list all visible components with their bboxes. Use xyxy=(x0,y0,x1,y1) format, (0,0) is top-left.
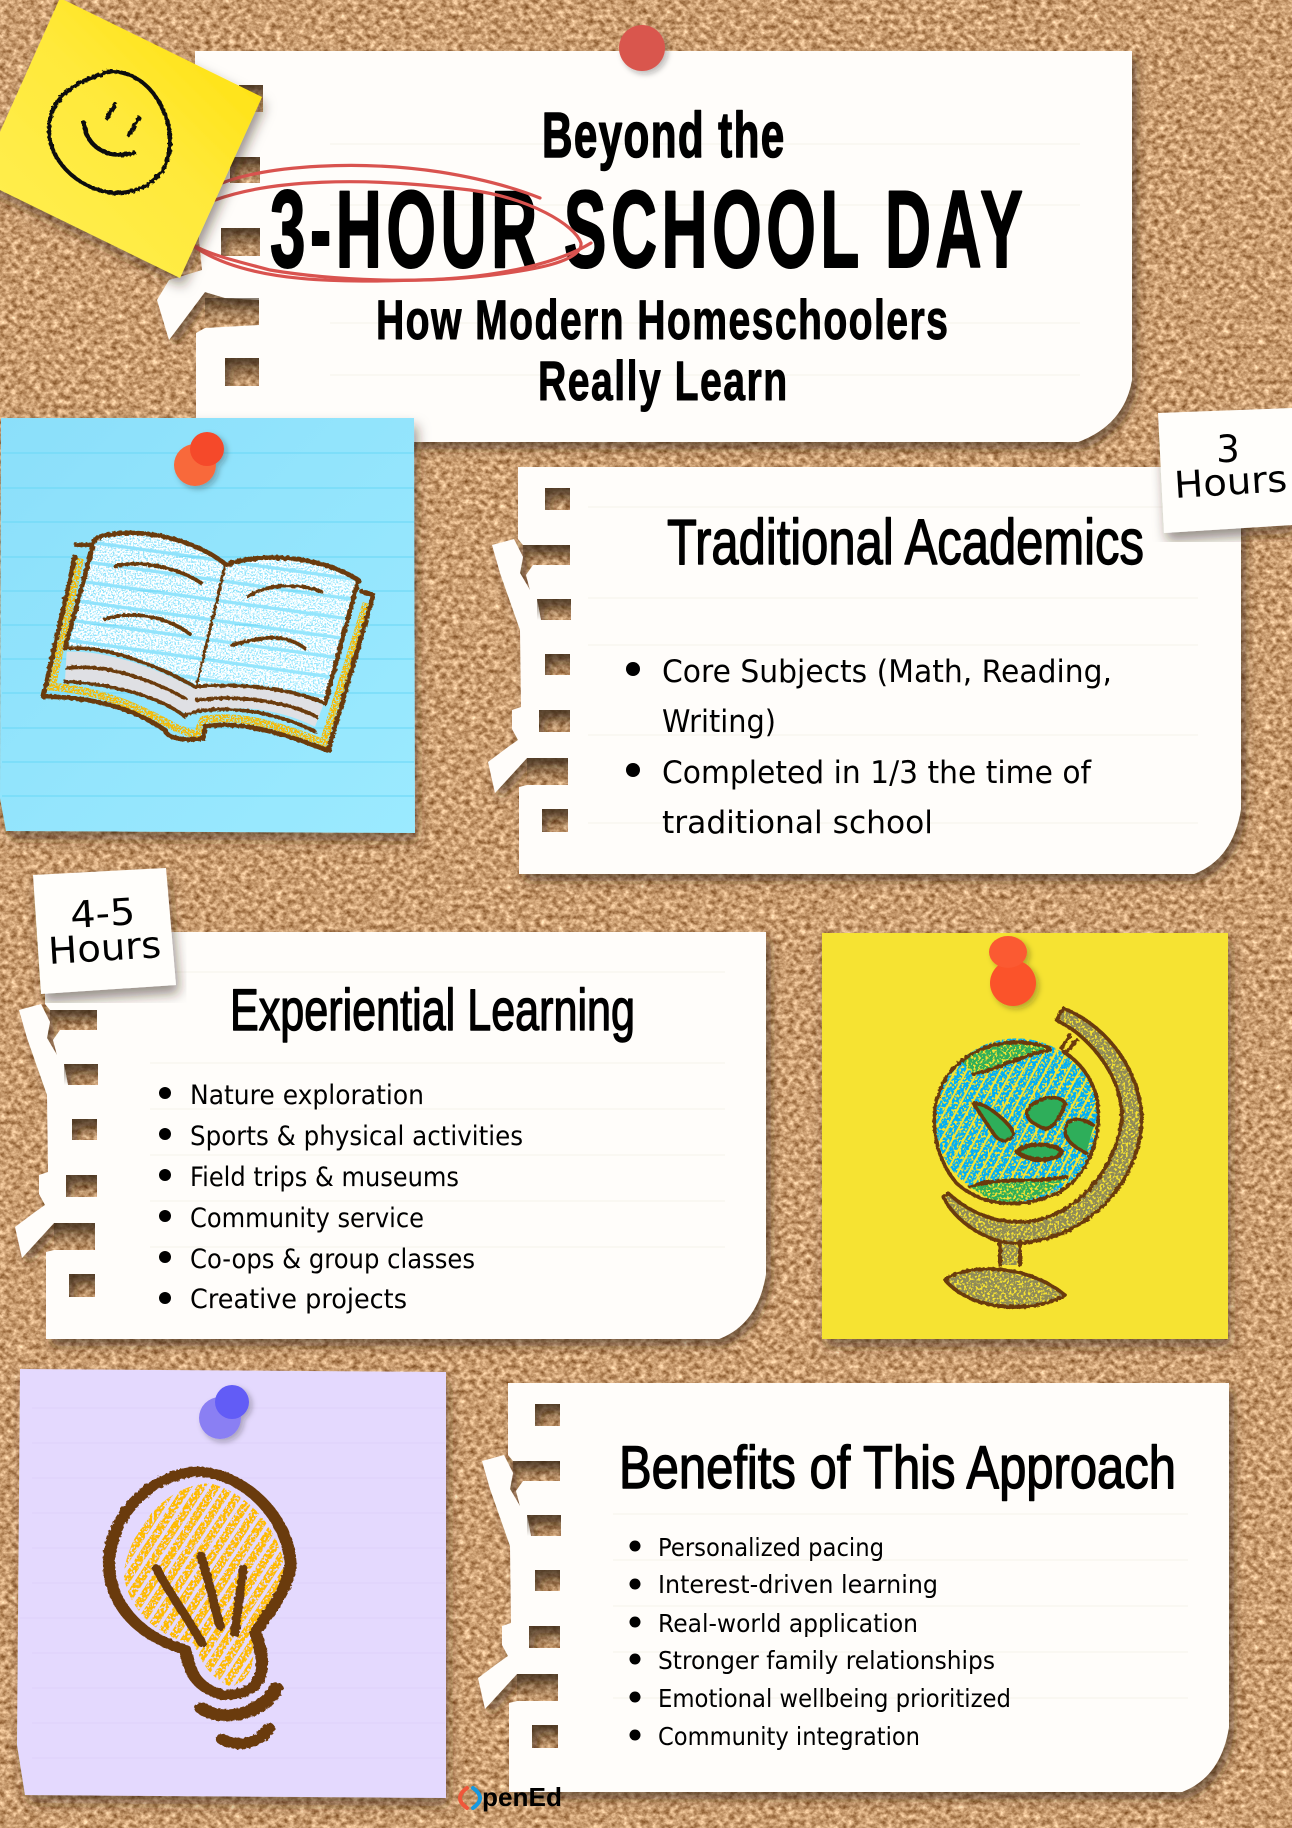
bullet list: Experiential Learning: Sports & physical activities xyxy=(190,1121,523,1152)
sticky note xyxy=(0,418,415,833)
panel: yellow sticky note with globe xyxy=(822,933,1228,1339)
bullet list: Benefits: Community integration xyxy=(658,1722,920,1751)
tag: 4-5 Hours xyxy=(33,868,176,994)
torn paper sheet xyxy=(478,1383,1229,1792)
red hand-drawn circle around 3-HOUR xyxy=(193,165,591,281)
bullet list: Experiential Learning: Co-ops & group classes xyxy=(190,1244,475,1275)
list item text: Core Subjects (Math, Reading, xyxy=(662,654,1112,690)
pin: orange-red xyxy=(174,432,224,486)
icon: open book xyxy=(43,533,373,751)
list item text: Nature exploration xyxy=(190,1080,424,1111)
hole shading: title paper xyxy=(205,85,263,386)
panel: Traditional Academics paper xyxy=(488,467,1241,874)
bullet list: Benefits: Emotional wellbeing prioritized xyxy=(658,1684,1011,1713)
pin: red-orange xyxy=(989,936,1036,1006)
panel: purple sticky note with light bulb xyxy=(17,1369,446,1798)
tag: 3 Hours: 3 xyxy=(1216,428,1240,471)
heading: Beyond the: Beyond the xyxy=(542,100,784,171)
heading: 3-HOUR SCHOOL DAY: 3-HOUR SCHOOL DAY xyxy=(270,169,1023,291)
sticky note xyxy=(0,0,262,278)
icon: globe xyxy=(934,1008,1142,1307)
sticky note xyxy=(822,933,1228,1339)
panel: yellow sticky note with smiley xyxy=(0,0,262,278)
pin: violet xyxy=(199,1385,249,1439)
hole shading xyxy=(50,1010,98,1297)
list item text: Personalized pacing xyxy=(658,1533,884,1562)
logo: OpenEd: penEd xyxy=(482,1782,562,1812)
subheading: Really Learn: Really Learn xyxy=(538,350,787,413)
heading: Benefits of This Approach: Benefits of This Approach xyxy=(619,1434,1176,1501)
bullet list: Experiential Learning: Creative projects xyxy=(190,1284,407,1315)
hole shading xyxy=(513,1404,561,1748)
heading: Experiential Learning: Experiential Learning xyxy=(230,978,635,1043)
bullet list: Traditional Academics xyxy=(626,654,1112,841)
tag: 3 Hours xyxy=(1158,408,1292,533)
bullet list: Benefits: Stronger family relationships xyxy=(658,1646,995,1675)
tag: 3 Hours: Hours xyxy=(1173,457,1288,507)
panel: Benefits of This Approach paper xyxy=(478,1383,1229,1792)
panel: title paper xyxy=(157,25,1132,442)
torn paper sheet xyxy=(488,467,1241,874)
panel: blue sticky note with book xyxy=(0,418,415,833)
tag: 4-5 Hours: 4-5 xyxy=(69,890,136,937)
panel: Experiential Learning paper xyxy=(15,932,766,1339)
bullet list: Traditional Academics: Completed in 1/3 the time of xyxy=(662,755,1092,791)
bullet list: Experiential Learning: Community service xyxy=(190,1203,424,1234)
subheading: How Modern Homeschoolers: How Modern Homeschoolers xyxy=(376,289,948,352)
bullet list: Experiential Learning xyxy=(159,1080,523,1315)
bullet list: Benefits xyxy=(630,1533,1011,1751)
bullet list: Benefits: Real-world application xyxy=(658,1609,918,1638)
pin: red xyxy=(619,25,665,71)
torn paper sheet: title xyxy=(157,51,1132,442)
sticky note xyxy=(17,1369,446,1798)
heading: Traditional Academics: Traditional Academics xyxy=(667,506,1144,578)
bullet list: Traditional Academics: Writing) xyxy=(662,704,776,740)
torn paper sheet xyxy=(15,932,766,1339)
bullet list: Experiential Learning: Field trips & museums xyxy=(190,1162,459,1193)
bullet list: Traditional Academics: traditional school xyxy=(662,805,933,841)
tag: 4-5 Hours: Hours xyxy=(47,923,162,973)
hole shading xyxy=(523,488,571,832)
icon: light bulb xyxy=(109,1472,290,1744)
icon: smiley face xyxy=(49,71,170,193)
bullet list: Benefits: Interest-driven learning xyxy=(658,1570,938,1599)
